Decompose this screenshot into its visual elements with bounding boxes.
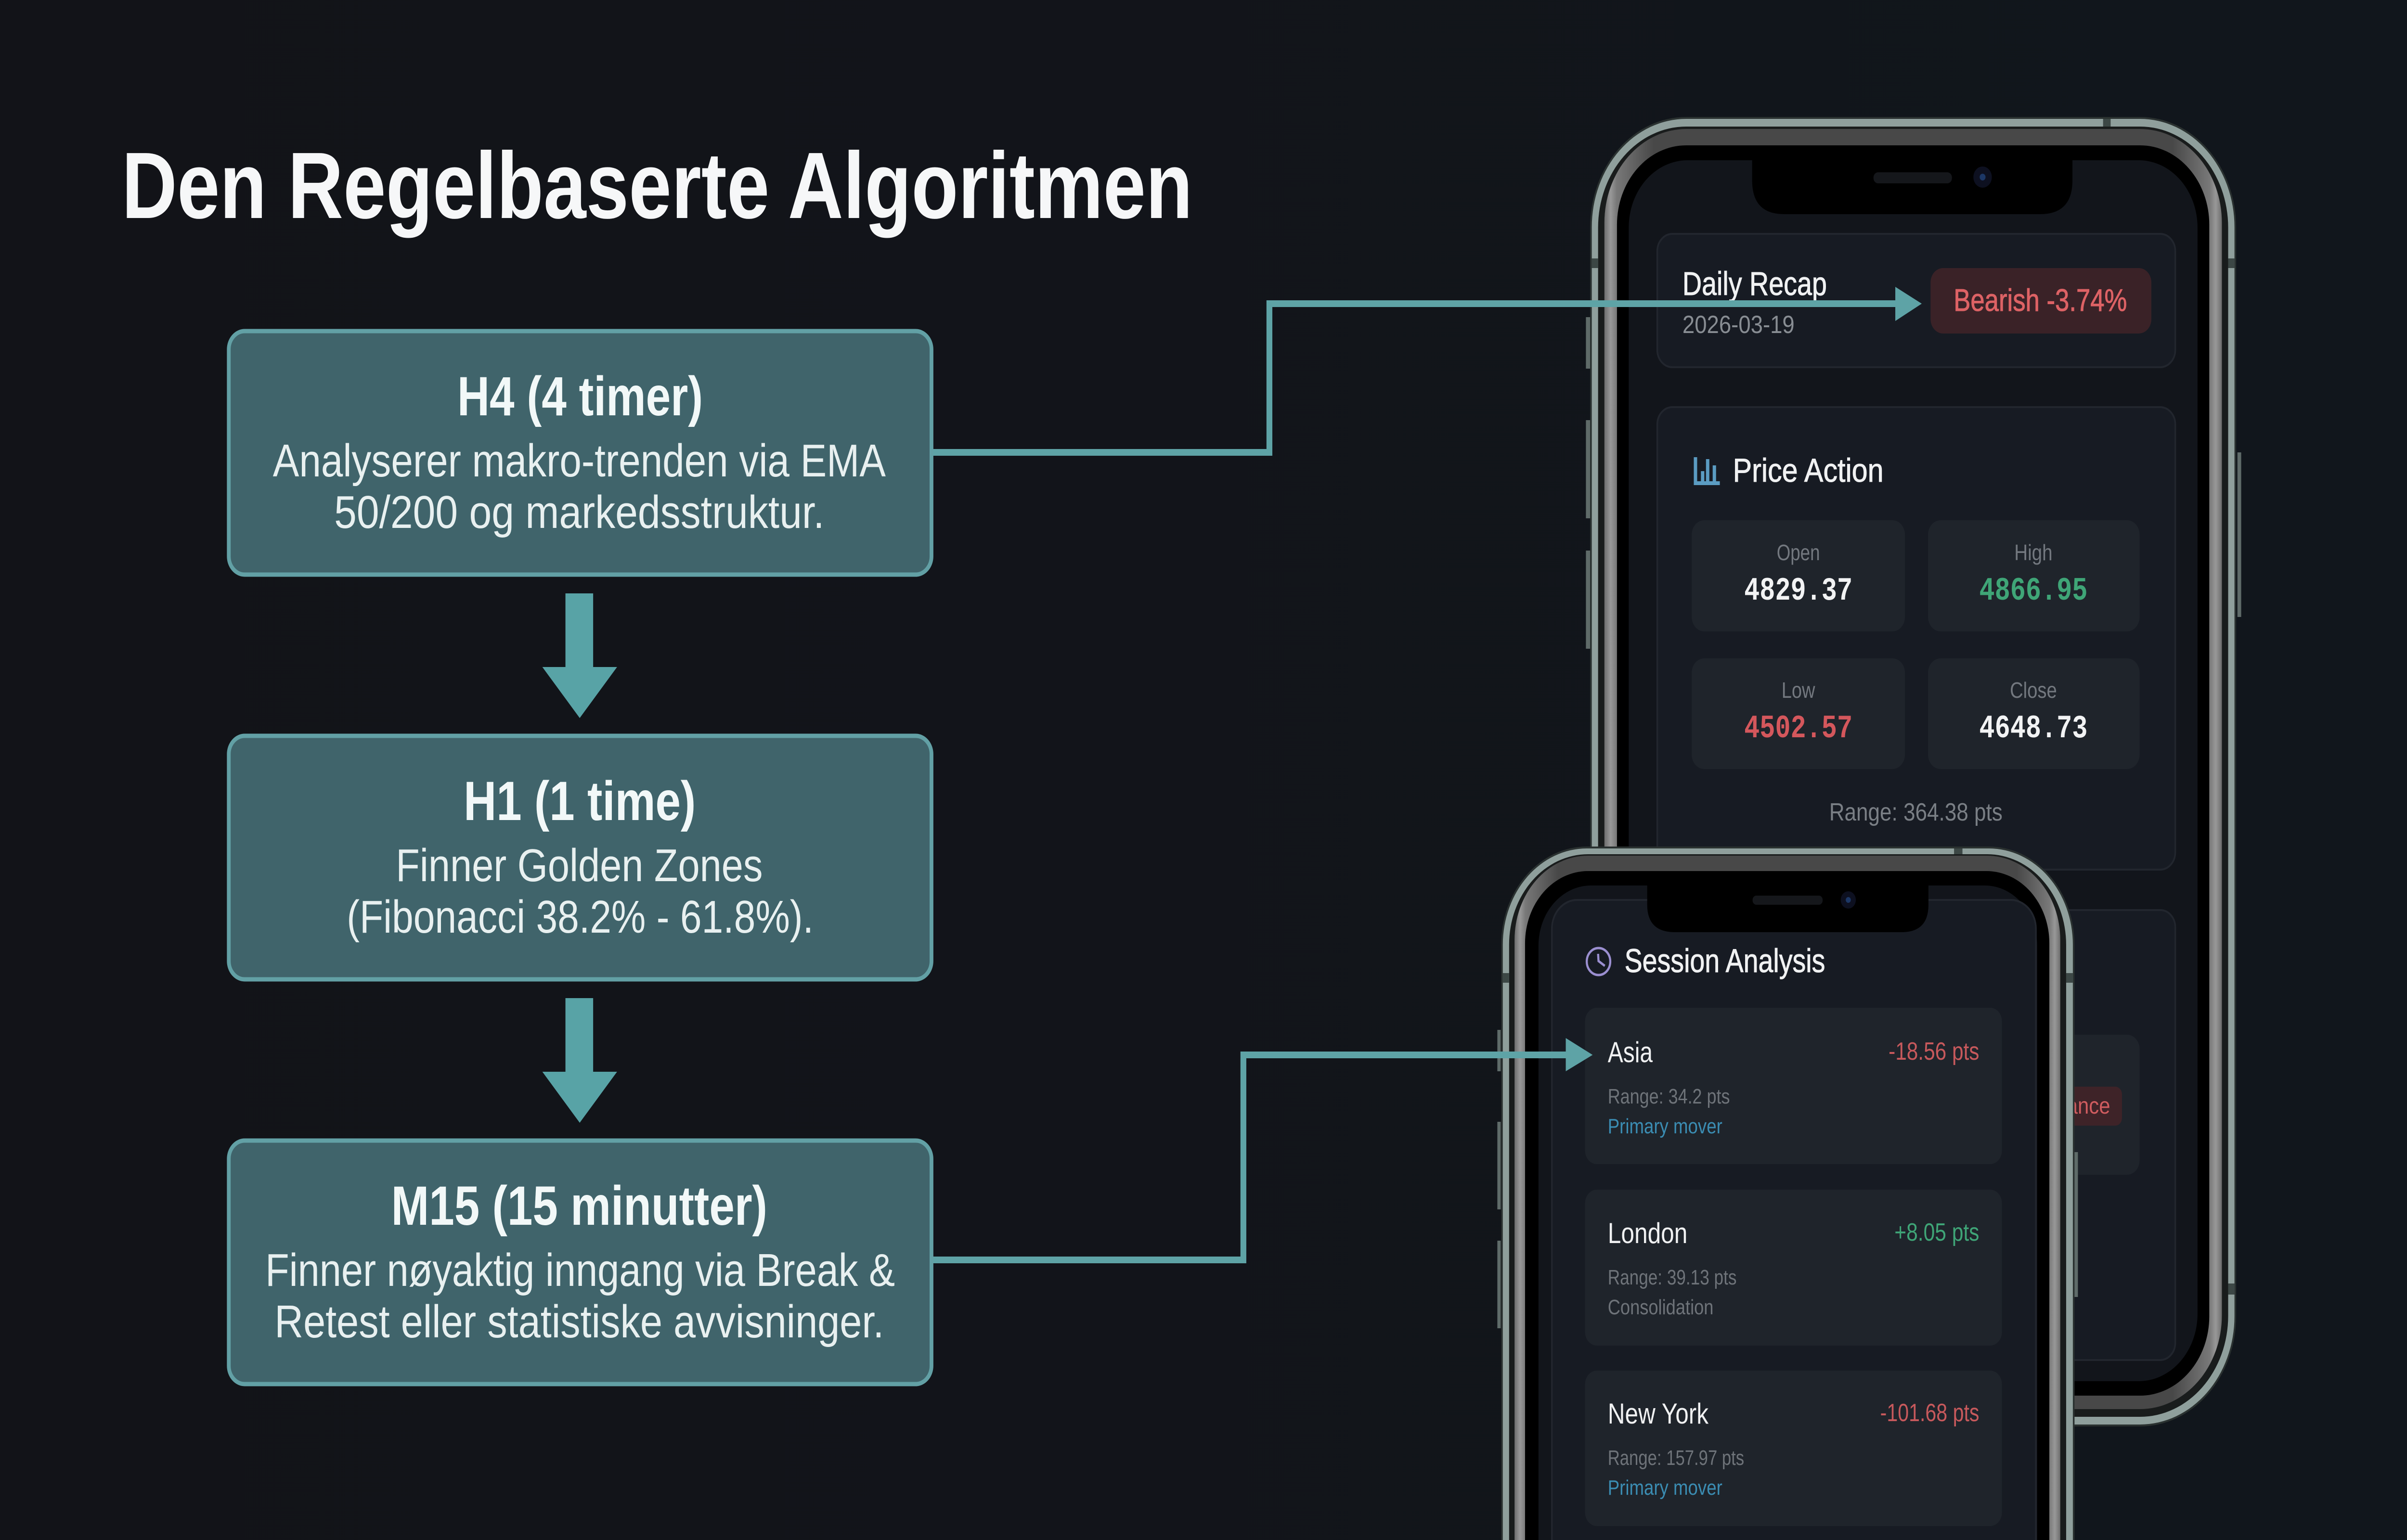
icon: bar chart (1694, 457, 1720, 485)
session card: London: London (1608, 1217, 1687, 1249)
card: price action: High (2014, 540, 2053, 565)
phone: daily recap (back) (1586, 117, 2241, 1426)
arrow: H1 to M15 (543, 998, 617, 1123)
card: price action: Close (2010, 678, 2057, 703)
panel: session analysis: Session Analysis (1625, 942, 1825, 979)
card: price action: 4829.37 (1744, 573, 1852, 610)
connector: M15 to Asia session (933, 1038, 1592, 1260)
card: daily recap (1657, 234, 2175, 367)
flow box: H4: H4 (4 timer) (457, 365, 703, 427)
card: price action: Open (1777, 540, 1820, 565)
flow box: H4: 50/200 og markedsstruktur. (334, 487, 825, 538)
session card: London (1585, 1190, 2002, 1346)
session card: New York: Range: 157.97 pts (1608, 1446, 1744, 1470)
flow box: H4: Analyserer makro-trenden via EMA (273, 435, 886, 487)
icon: clock (1587, 948, 1610, 975)
card: lower panel (mostly hidden): Balance (2037, 1092, 2110, 1119)
card: price action: 4866.95 (1979, 573, 2087, 610)
flow box: H1: H1 (1 time) (464, 770, 696, 832)
session card: Asia: -18.56 pts (1889, 1038, 1979, 1065)
flow box: H1 (229, 736, 932, 979)
session card: London: Consolidation (1608, 1296, 1713, 1319)
session card: New York (1585, 1371, 2002, 1526)
session card: London: Range: 39.13 pts (1608, 1266, 1736, 1289)
title: Den Regelbaserte Algoritmen (122, 133, 1192, 238)
flow box: H1: Finner Golden Zones (396, 840, 763, 891)
card: daily recap: Daily Recap (1682, 265, 1827, 302)
panel: session analysis (1552, 883, 2036, 1540)
card: price action: Low (1782, 678, 1815, 703)
session card: New York: New York (1608, 1398, 1709, 1430)
flow box: M15: Finner nøyaktig inngang via Break & (265, 1245, 895, 1296)
notch (1647, 883, 1928, 932)
card: price action: Range: 364.38 pts (1829, 798, 2003, 826)
card: price action: Price Action (1733, 451, 1884, 489)
session card: Asia: Primary mover (1608, 1115, 1722, 1138)
flow box: M15: M15 (15 minutter) (391, 1175, 767, 1237)
phone: session analysis (front) (1497, 847, 2078, 1540)
flow box: H1: (Fibonacci 38.2% - 61.8%). (347, 891, 814, 943)
card: price action (1657, 407, 2175, 870)
session card: New York: Primary mover (1608, 1476, 1722, 1500)
session card: Asia: Range: 34.2 pts (1608, 1085, 1730, 1108)
session card: London: +8.05 pts (1894, 1219, 1979, 1246)
session card: New York: -101.68 pts (1880, 1399, 1979, 1427)
card: daily recap: Bearish -3.74% (1954, 282, 2127, 318)
flow box: M15: Retest eller statistiske avvisninger. (274, 1296, 884, 1348)
notch (1752, 156, 2072, 214)
card: price action: 4648.73 (1979, 711, 2087, 747)
connector: H4 to Daily Recap (933, 287, 1922, 452)
arrow: H4 to H1 (543, 593, 617, 718)
card: daily recap: 2026-03-19 (1682, 311, 1795, 339)
card: price action: 4502.57 (1744, 711, 1852, 747)
flow box: M15 (229, 1141, 932, 1384)
session card: Asia (1585, 1008, 2002, 1164)
card: lower panel (mostly hidden) (1657, 910, 2175, 1360)
flow box: H4 (229, 331, 932, 575)
session card: Asia: Asia (1608, 1036, 1653, 1068)
